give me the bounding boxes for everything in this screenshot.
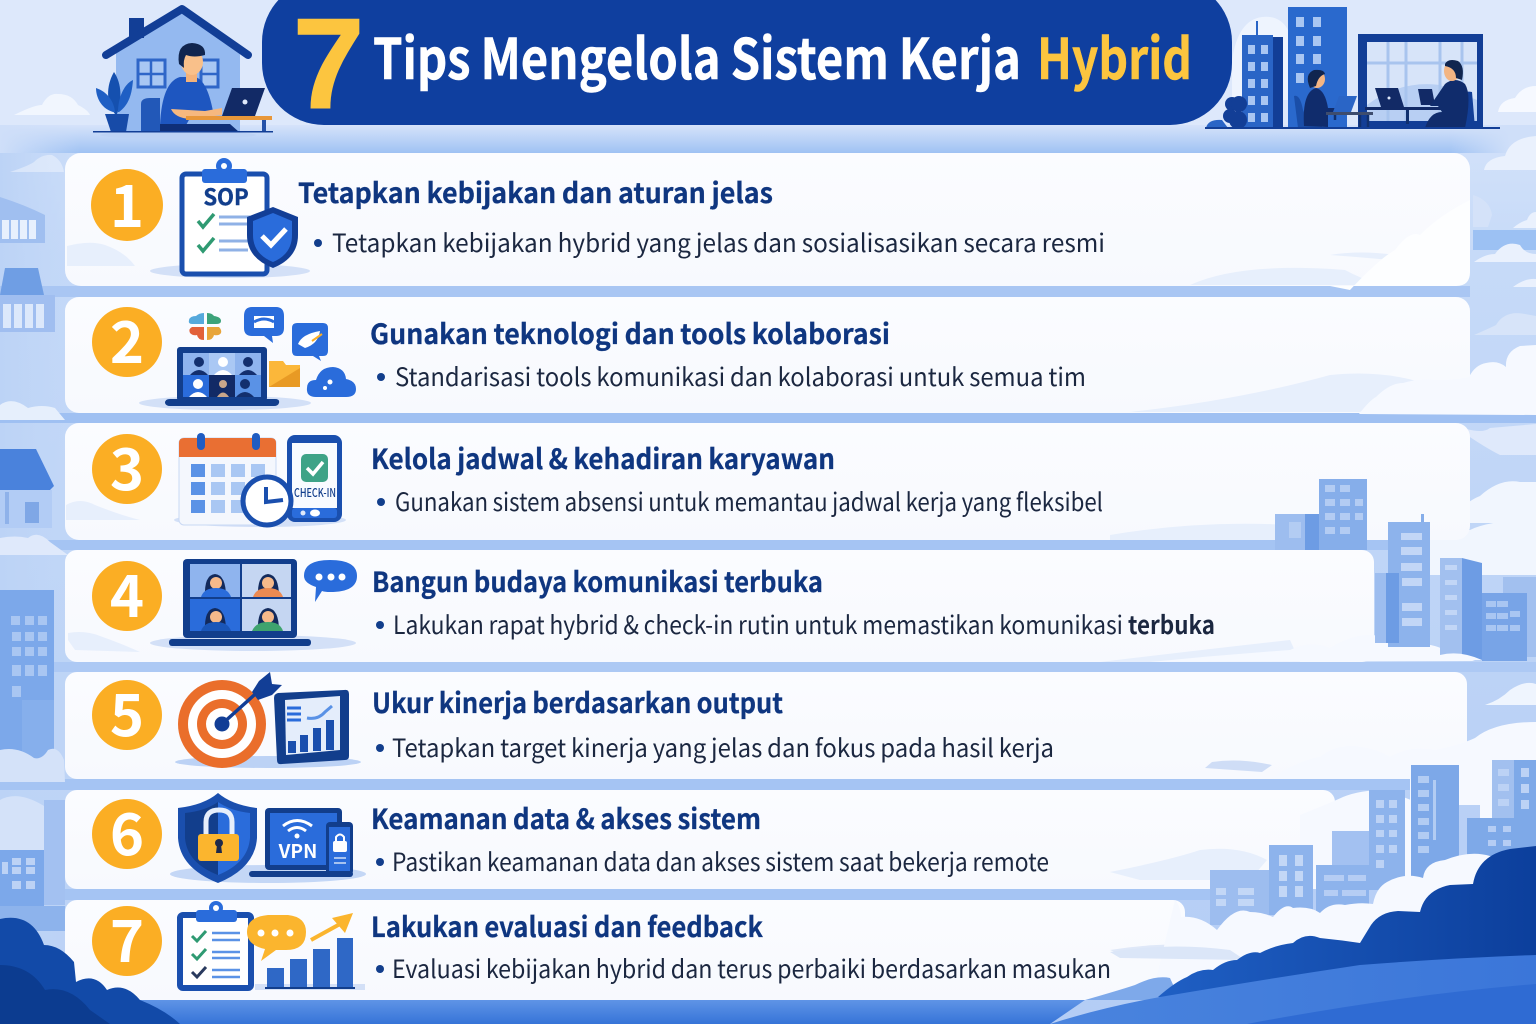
bullet 4: terbuka	[1128, 606, 1215, 642]
row 2	[92, 296, 1086, 410]
bullet 2: Standarisasi tools komunikasi dan kolaborasi untuk semua tim	[395, 358, 1086, 394]
icon: shield lock and VPN laptop	[170, 793, 366, 883]
background buildings left	[0, 197, 68, 931]
number badge 3: 3	[110, 423, 144, 507]
title	[293, 0, 1192, 136]
hills and bushes bottom left	[0, 918, 1085, 1024]
row 3	[92, 423, 1103, 527]
background clouds upper left	[10, 94, 90, 172]
number badge 2: 2	[110, 296, 144, 380]
heading 1: Tetapkan kebijakan dan aturan jelas	[298, 172, 773, 212]
background city skyline right	[1210, 479, 1536, 925]
row 7	[92, 895, 1111, 990]
foreground clouds bottom right	[1110, 854, 1536, 1005]
icon: SOP clipboard with shield	[150, 158, 310, 278]
row 1	[91, 158, 1105, 278]
card 4	[65, 550, 1374, 662]
row 4	[92, 550, 1215, 651]
number badge 1	[91, 160, 163, 244]
icon: video meeting laptop with chat bubble	[150, 559, 357, 651]
number badge 5	[92, 669, 162, 753]
bullet 7: Evaluasi kebijakan hybrid dan terus perbaiki berdasarkan masukan	[392, 950, 1111, 986]
heading 3: Kelola jadwal & kehadiran karyawan	[371, 438, 835, 478]
card 7	[65, 900, 1185, 1000]
illustration: working from home	[93, 9, 273, 139]
number badge 2	[92, 296, 162, 380]
number badge 6: 6	[110, 788, 144, 872]
card 6	[65, 790, 1335, 889]
header pill	[262, 0, 1232, 125]
heading 4: Bangun budaya komunikasi terbuka	[372, 561, 823, 601]
bullet 4: Lakukan rapat hybrid & check-in rutin untuk memastikan komunikasi	[393, 606, 1123, 642]
bullet 1: Tetapkan kebijakan hybrid yang jelas dan sosialisasikan secara resmi	[332, 224, 1105, 260]
number badge 3	[92, 423, 162, 507]
title: Tips Mengelola Sistem Kerja	[373, 15, 1021, 96]
bullet 6: Pastikan keamanan data dan akses sistem saat bekerja remote	[392, 843, 1049, 879]
number badge 7: 7	[110, 895, 144, 979]
heading 2: Gunakan teknologi dan tools kolaborasi	[370, 313, 890, 353]
number badge 4	[92, 550, 162, 634]
title: Hybrid	[1037, 15, 1192, 96]
heading 7: Lakukan evaluasi dan feedback	[371, 906, 763, 946]
icon: collaboration tools	[139, 307, 356, 410]
card 5	[65, 672, 1467, 779]
soft cloud shading inside cards	[66, 200, 1470, 958]
card 1	[65, 153, 1470, 286]
bullet 3: Gunakan sistem absensi untuk memantau jadwal kerja yang fleksibel	[395, 483, 1103, 519]
heading 6: Keamanan data & akses sistem	[371, 798, 761, 838]
icon: SOP clipboard with shield: SOP	[203, 180, 249, 212]
card 3	[65, 423, 1470, 540]
number badge 5: 5	[110, 669, 144, 753]
row 5	[92, 669, 1054, 768]
icon: calendar clock check-in phone	[174, 433, 346, 527]
icon: calendar clock check-in phone: CHECK-IN	[294, 484, 336, 501]
background clouds upper right	[1430, 136, 1536, 705]
bullet 5: Tetapkan target kinerja yang jelas dan fokus pada hasil kerja	[392, 729, 1054, 765]
right side clouds over the cards	[1150, 345, 1536, 889]
row 6	[92, 788, 1049, 883]
illustration: office	[1205, 7, 1536, 129]
number badge 4: 4	[110, 550, 144, 634]
number badge 1: 1	[110, 160, 144, 244]
hills and bushes bottom right	[1050, 846, 1536, 1024]
icon: target with arrow and chart tablet	[175, 672, 361, 768]
icon: checklist feedback bubble and growth chart	[180, 901, 365, 990]
icon: shield lock and VPN laptop: VPN	[278, 837, 317, 864]
card 2	[65, 297, 1470, 413]
heading 5: Ukur kinerja berdasarkan output	[372, 682, 783, 722]
number badge 7	[92, 895, 162, 979]
number badge 6	[92, 788, 162, 872]
